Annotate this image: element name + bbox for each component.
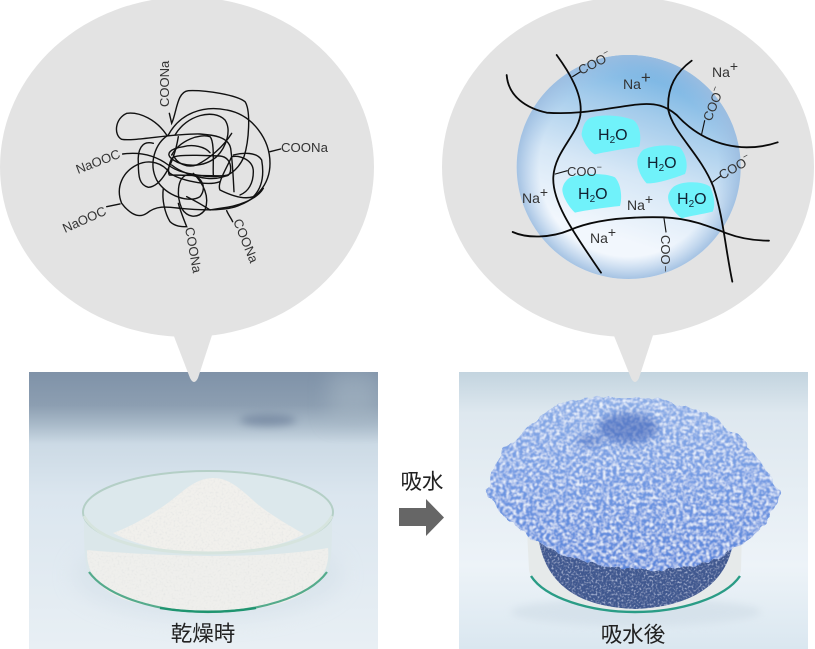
- label: COONa lower right: COONa: [230, 217, 262, 266]
- side-chain stubs: [555, 72, 721, 232]
- label: Na+ left: +: [540, 184, 548, 200]
- label: COO- right: −: [741, 150, 750, 162]
- photo: swollen gel in glass dish: [459, 372, 808, 649]
- water blobs: [562, 116, 714, 218]
- label: H2O top left: O: [615, 127, 628, 144]
- label: COO- right: COO: [716, 155, 749, 183]
- caption: after absorption: 吸水後: [601, 623, 665, 647]
- label: COO- top left: COO: [576, 51, 609, 78]
- label: COO- top right: COO: [700, 90, 725, 123]
- label: COONa right: COONa: [281, 140, 329, 155]
- diagram: tangled polymer chain: [107, 91, 281, 227]
- label: Na+ left: Na: [522, 190, 540, 206]
- diagram: swollen polymer network sphere: [507, 55, 778, 282]
- label: Na+ centre: Na: [627, 197, 645, 213]
- label: Na+ top: +: [641, 68, 651, 87]
- label: H2O lower right: O: [694, 191, 707, 208]
- label: H2O centre right: 2: [659, 163, 665, 174]
- water sphere: [517, 55, 741, 279]
- label: Na+ centre: +: [645, 191, 653, 207]
- speech bubble: dry polymer: [0, 0, 374, 382]
- label: H2O centre right: H: [647, 155, 659, 172]
- label: COO- centre left: −: [597, 162, 602, 172]
- label: Na+ top right: +: [730, 58, 738, 74]
- label: H2O lower left: H: [578, 186, 590, 203]
- label: COO- centre left: COO: [567, 164, 597, 179]
- label: COO- bottom: −: [659, 266, 671, 272]
- caption: dried state: 乾燥時: [171, 622, 235, 646]
- label: Na+ bottom: Na: [590, 230, 608, 246]
- label: Na+ top right: Na: [712, 64, 730, 80]
- label: COONa lower centre: COONa: [182, 226, 205, 275]
- label: Na+ top: Na: [623, 76, 641, 92]
- photo: dried powder in glass dish: [29, 372, 378, 649]
- label: NaOOC upper: NaOOC: [74, 146, 122, 177]
- arrow: process direction: [399, 499, 444, 536]
- label: H2O centre right: O: [664, 155, 677, 172]
- label: COONa top: COONa: [157, 60, 172, 107]
- label: H2O lower left: O: [595, 186, 608, 203]
- label: H2O top left: H: [598, 127, 610, 144]
- speech bubble: swollen polymer: [442, 0, 814, 382]
- polymer chains: [507, 55, 778, 282]
- label: H2O lower left: 2: [590, 194, 596, 205]
- heading: water absorption: 吸水: [400, 470, 444, 494]
- label: NaOOC lower: NaOOC: [60, 203, 108, 236]
- label: H2O top left: 2: [610, 135, 616, 146]
- label: COO- top right: −: [709, 84, 720, 93]
- label: COO- bottom: COO: [658, 235, 673, 265]
- label: H2O lower right: 2: [689, 199, 695, 210]
- label: H2O lower right: H: [677, 191, 689, 208]
- label: COO- top left: −: [601, 47, 610, 58]
- label: Na+ bottom: +: [608, 224, 616, 240]
